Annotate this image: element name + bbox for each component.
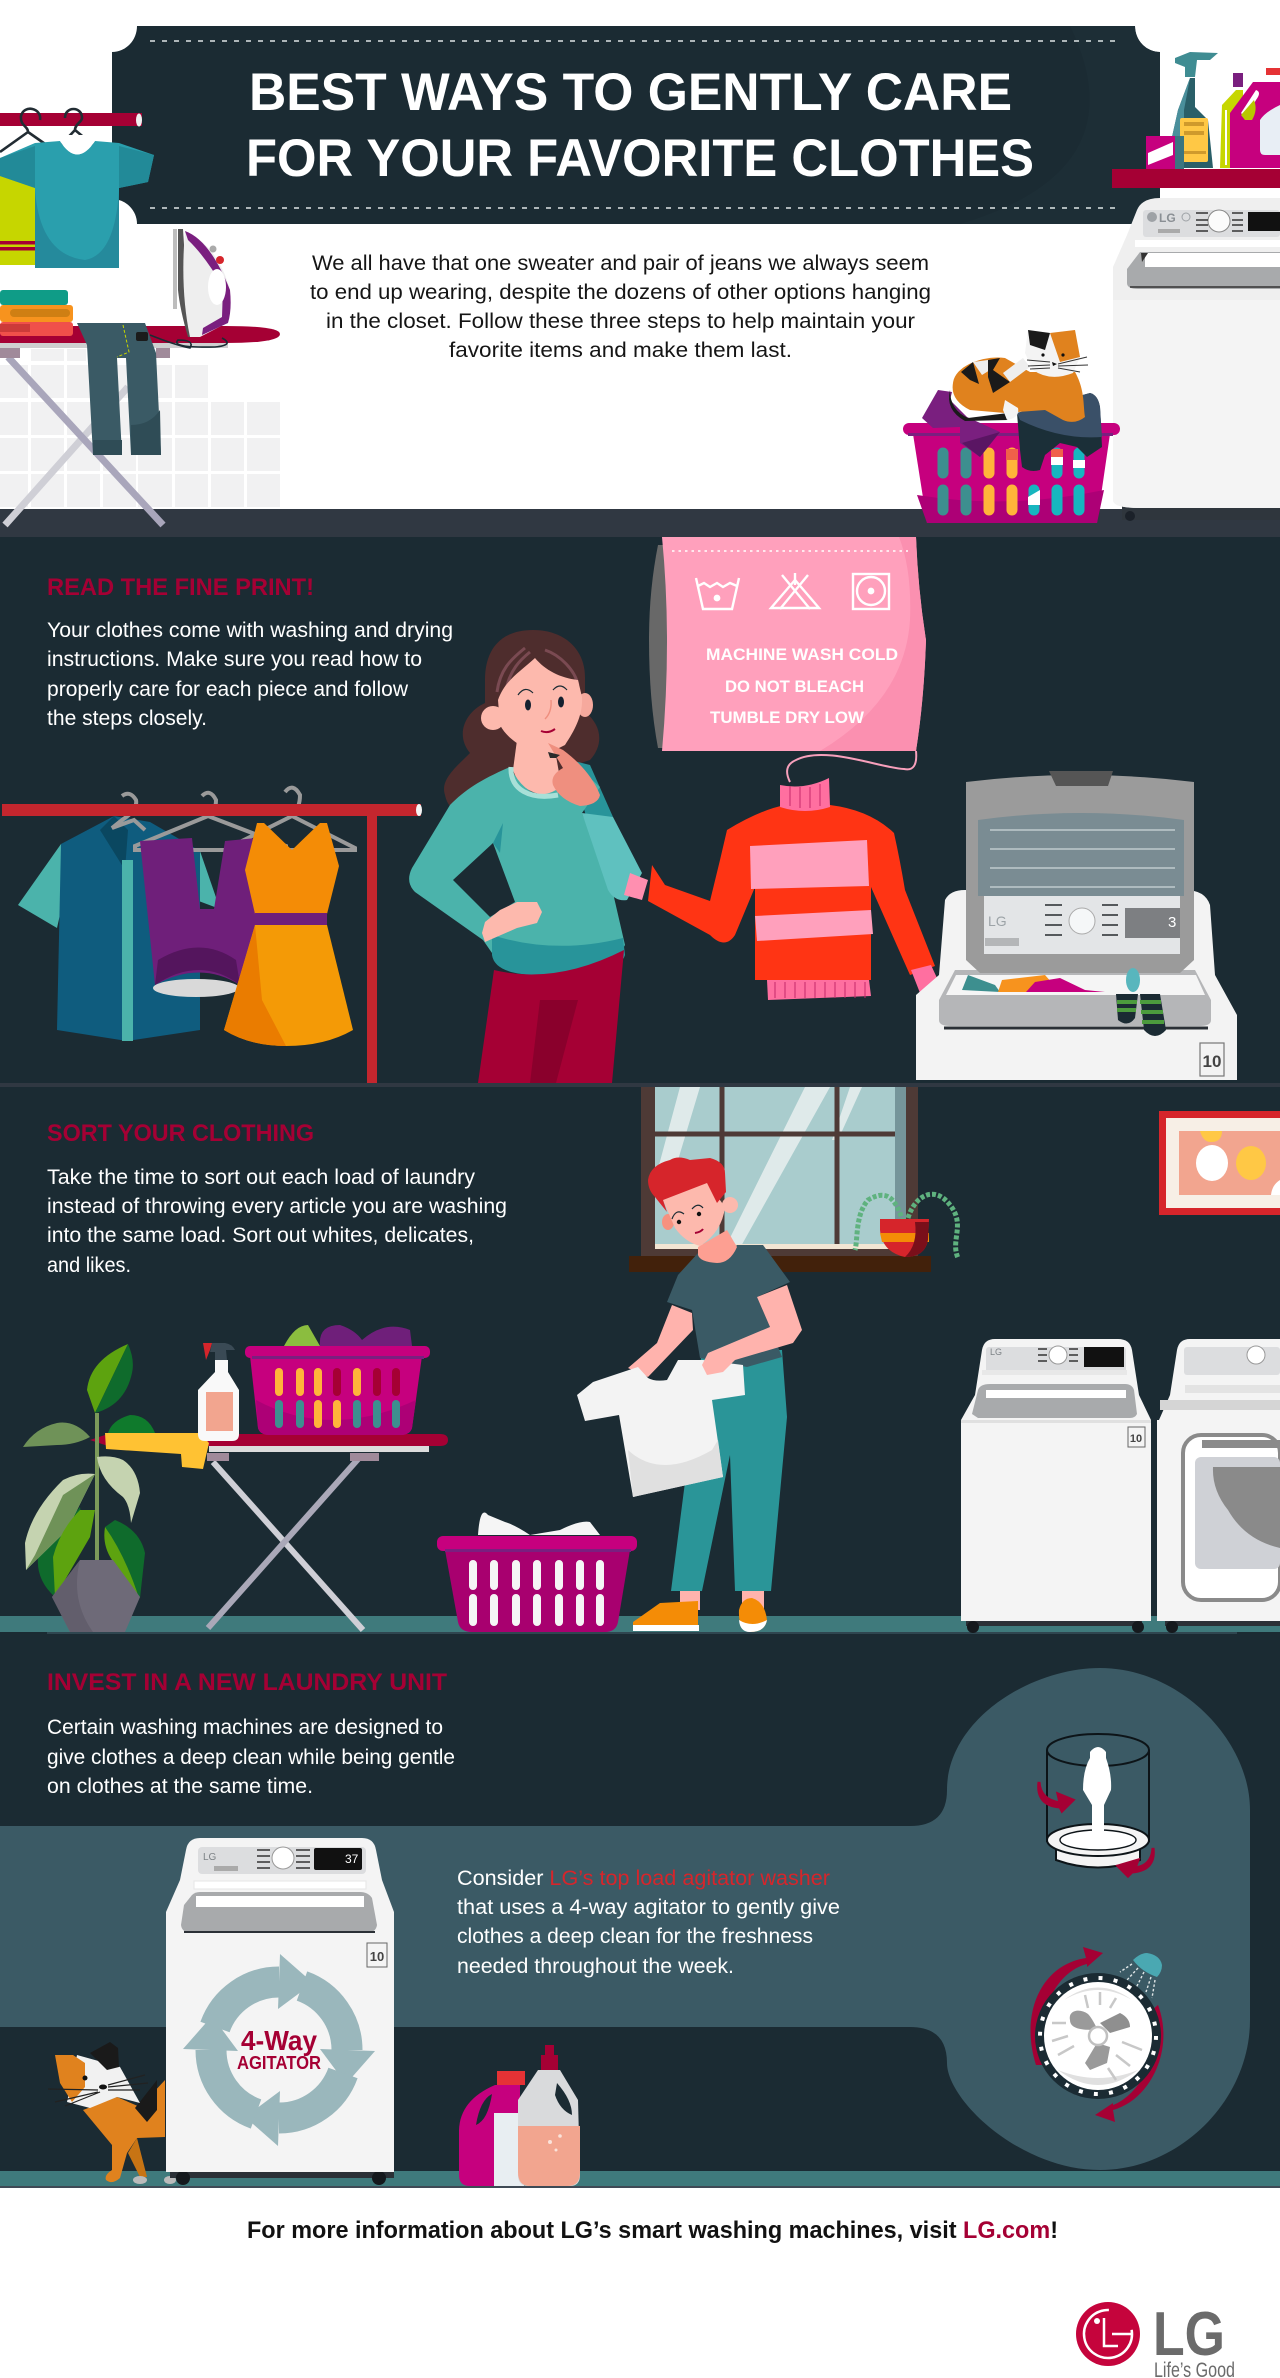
energy badge: 10 bbox=[370, 1949, 384, 1964]
energy badge: 10 bbox=[1203, 1052, 1221, 1071]
blue shirt bbox=[18, 816, 220, 1041]
agitator label: AGITATOR bbox=[237, 2053, 321, 2073]
man character bbox=[577, 1158, 802, 1632]
icon: wash tub bbox=[696, 578, 739, 609]
icon: agitator drum bbox=[1039, 1734, 1153, 1876]
label text bbox=[706, 645, 898, 727]
basket on floor bbox=[437, 1512, 637, 1632]
footer text: For more information about LG’s smart washing machines, visit LG.com! bbox=[247, 2217, 1058, 2244]
hangers bbox=[112, 788, 355, 852]
right sleeve bbox=[582, 813, 642, 900]
callout text bbox=[457, 1867, 840, 1978]
body text: Your clothes come with washing and drying bbox=[47, 619, 453, 642]
neck bbox=[698, 1230, 737, 1263]
body text bbox=[47, 619, 453, 730]
hip hand bbox=[482, 902, 542, 942]
body text: and likes. bbox=[47, 1254, 131, 1277]
agitator label bbox=[237, 2025, 321, 2073]
collar bbox=[511, 767, 558, 796]
washer with 4-way agitator bbox=[166, 1838, 394, 2185]
title text: FOR YOUR FAVORITE CLOTHES bbox=[246, 129, 1034, 188]
body text: give clothes a deep clean while being gentle bbox=[47, 1746, 455, 1769]
callout text: needed throughout the week. bbox=[457, 1955, 734, 1978]
body text bbox=[47, 1166, 507, 1277]
title text: BEST WAYS TO GENTLY CARE bbox=[249, 63, 1012, 122]
body text: on clothes at the same time. bbox=[47, 1775, 313, 1798]
basket on table bbox=[245, 1325, 430, 1435]
dryer bbox=[1157, 1339, 1280, 1633]
torso and left arm bbox=[409, 760, 625, 975]
tile wall bbox=[0, 349, 280, 507]
intro text: in the closet. Follow these three steps to help maintain your bbox=[326, 310, 915, 333]
intro text: We all have that one sweater and pair of jeans we always seem bbox=[312, 252, 929, 275]
t-shirt bbox=[667, 1245, 790, 1367]
left arm bbox=[628, 1305, 693, 1377]
ironing table bbox=[90, 1433, 448, 1630]
legs bbox=[680, 1585, 700, 1610]
washer with 4-way agitator: 37 bbox=[345, 1852, 359, 1866]
LG logo bbox=[1076, 2300, 1235, 2378]
body text: into the same load. Sort out whites, delicates, bbox=[47, 1224, 474, 1247]
panel: read the fine print bbox=[0, 537, 1280, 1087]
LG logo: LG bbox=[1153, 2300, 1225, 2369]
panel: footer bbox=[247, 2217, 1235, 2378]
panel: intro bbox=[0, 26, 1280, 537]
icon: calico cat on basket bbox=[949, 330, 1088, 422]
spray bottle bbox=[198, 1343, 239, 1441]
purple pants bbox=[140, 838, 262, 997]
heading: READ THE FINE PRINT! bbox=[47, 574, 314, 601]
window bbox=[629, 1087, 931, 1272]
top right washer bbox=[1113, 198, 1280, 521]
open washer bbox=[916, 771, 1237, 1080]
icon: do not bleach bbox=[771, 573, 819, 609]
intro text bbox=[310, 252, 931, 362]
teal band and drum bulb bbox=[0, 1668, 1250, 2170]
painting bbox=[1159, 1111, 1280, 1215]
title text bbox=[246, 63, 1034, 188]
laundry basket with clothes bbox=[903, 390, 1120, 523]
body text: properly care for each piece and follow bbox=[47, 678, 409, 701]
body text: Take the time to sort out each load of laundry bbox=[47, 1166, 476, 1189]
heading: SORT YOUR CLOTHING bbox=[47, 1120, 314, 1147]
laundry in tub bbox=[962, 975, 1000, 992]
body text bbox=[47, 1716, 455, 1798]
potted plant on sill bbox=[855, 1194, 958, 1258]
callout text: that uses a 4-way agitator to gently give bbox=[457, 1896, 840, 1919]
pants bbox=[478, 950, 624, 1083]
open washer: 3 bbox=[1168, 914, 1176, 931]
top right washer: LG bbox=[1159, 211, 1176, 225]
washer with 4-way agitator: LG bbox=[203, 1852, 217, 1863]
white shirt held bbox=[577, 1360, 745, 1497]
floor strip bbox=[0, 509, 1280, 537]
clothes rack bbox=[2, 788, 422, 1083]
neck bbox=[513, 740, 562, 795]
agitator label: 4-Way bbox=[241, 2025, 317, 2056]
intro text: favorite items and make them last. bbox=[449, 339, 792, 362]
socks bbox=[1116, 994, 1138, 1024]
label text: DO NOT BLEACH bbox=[725, 677, 864, 696]
body text: instructions. Make sure you read how to bbox=[47, 648, 422, 671]
washer: LG bbox=[990, 1347, 1002, 1357]
woman character bbox=[409, 630, 648, 1083]
agitator arrows bbox=[183, 1954, 375, 2146]
sleeve back bbox=[570, 760, 613, 830]
icon: tumble dry bbox=[853, 574, 889, 609]
washer bbox=[961, 1339, 1151, 1633]
floor plant bbox=[23, 1344, 155, 1632]
heading: INVEST IN A NEW LAUNDRY UNIT bbox=[47, 1669, 447, 1696]
intro text: to end up wearing, despite the dozens of other options hanging bbox=[310, 281, 931, 304]
clothes rail with shirts bbox=[0, 109, 154, 268]
energy badge bbox=[367, 1943, 387, 1967]
panel: sort your clothing bbox=[0, 1087, 1280, 1635]
ironing board with stack, jeans and iron bbox=[0, 229, 280, 525]
icon: calico cat bbox=[48, 2042, 176, 2184]
rotation arrows bbox=[1039, 1782, 1073, 1811]
shelf with cleaning bottles bbox=[1112, 52, 1280, 188]
energy badge bbox=[1200, 1043, 1224, 1076]
body text: Certain washing machines are designed to bbox=[47, 1716, 443, 1739]
open washer: LG bbox=[988, 913, 1007, 929]
red sweater bbox=[648, 778, 937, 1000]
icon: top view drum bbox=[1031, 1947, 1163, 2122]
right arm and hand bbox=[702, 1285, 802, 1375]
care label tag bbox=[649, 537, 926, 782]
body text: instead of throwing every article you are washing bbox=[47, 1195, 507, 1218]
body text: the steps closely. bbox=[47, 707, 207, 730]
callout text: clothes a deep clean for the freshness bbox=[457, 1925, 813, 1948]
label text: TUMBLE DRY LOW bbox=[710, 708, 865, 727]
energy badge bbox=[1128, 1427, 1145, 1447]
head bbox=[722, 1197, 738, 1213]
raised hand bbox=[548, 743, 600, 806]
title banner bbox=[112, 26, 1160, 224]
orange dress bbox=[224, 823, 353, 1046]
callout text: Consider LG’s top load agitator washer bbox=[457, 1867, 830, 1890]
energy badge: 10 bbox=[1130, 1433, 1142, 1445]
panel: invest in a new laundry unit bbox=[0, 1634, 1280, 2188]
cuff bbox=[624, 873, 648, 900]
label text: MACHINE WASH COLD bbox=[706, 645, 898, 664]
detergent bottles bbox=[459, 2045, 580, 2186]
